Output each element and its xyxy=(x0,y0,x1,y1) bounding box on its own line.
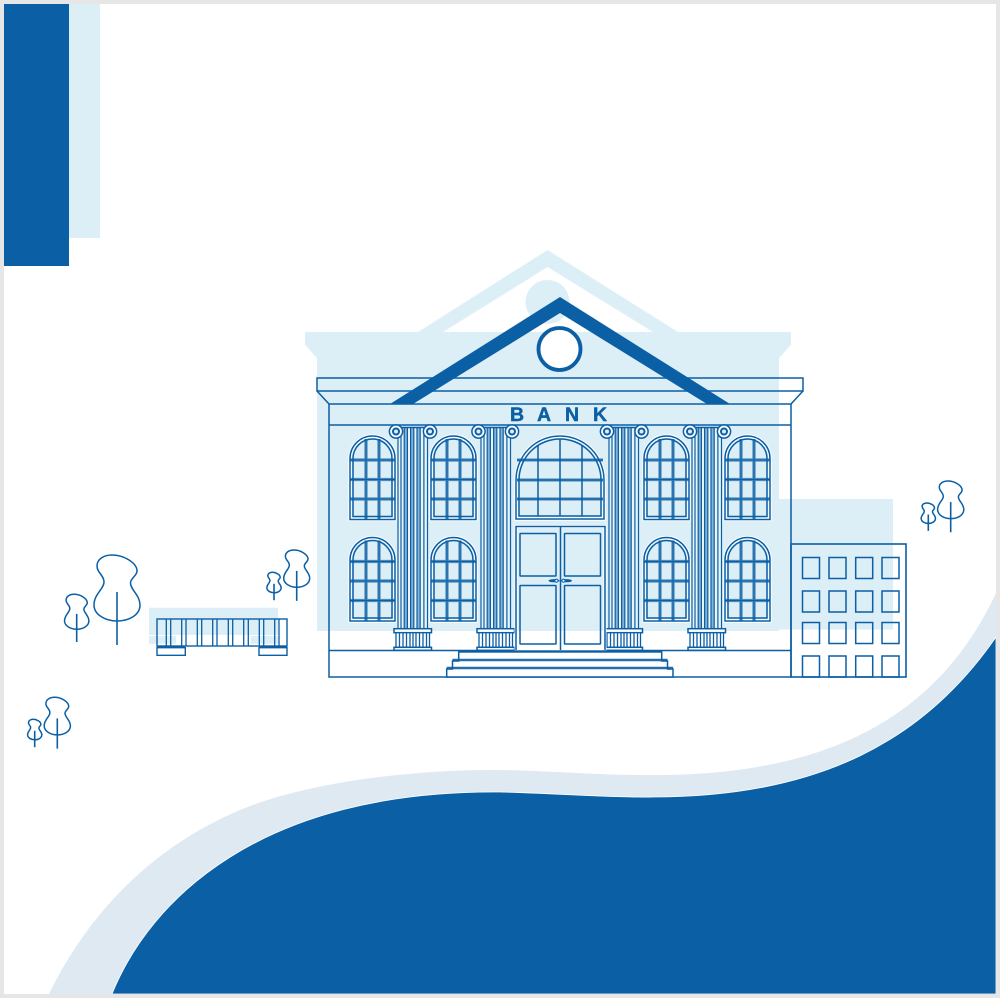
decorative corner block: pale bar xyxy=(69,4,100,238)
double door xyxy=(516,526,605,650)
bench shadow xyxy=(149,608,278,644)
roof pediment xyxy=(390,297,730,404)
pale wave xyxy=(49,593,996,994)
park bench xyxy=(149,608,287,655)
decorative corner block: blue bar xyxy=(4,4,69,266)
trees beside the bank xyxy=(267,550,310,601)
trees by the bench xyxy=(65,555,140,645)
entrance steps xyxy=(447,652,673,677)
side building xyxy=(791,544,906,677)
cornice xyxy=(317,378,803,404)
trees lower left xyxy=(28,697,70,749)
bench legs xyxy=(157,648,287,655)
large arched window over door xyxy=(516,436,604,519)
round gable window xyxy=(538,328,580,370)
column 4 xyxy=(683,425,731,650)
offset pale silhouette of the bank xyxy=(305,250,893,631)
blue wave xyxy=(112,637,996,994)
door handles xyxy=(548,579,572,582)
column 2 xyxy=(472,425,519,650)
column 1 xyxy=(389,425,437,650)
building outline and base xyxy=(329,404,791,677)
side building windows xyxy=(802,558,899,677)
trees on the right xyxy=(921,481,964,532)
bench slats xyxy=(157,619,287,646)
bank building xyxy=(317,297,803,677)
arched windows, upper row xyxy=(350,436,770,520)
arched windows, lower row xyxy=(350,538,770,621)
column 3 xyxy=(600,425,648,650)
bank sign: BANK xyxy=(510,404,607,426)
